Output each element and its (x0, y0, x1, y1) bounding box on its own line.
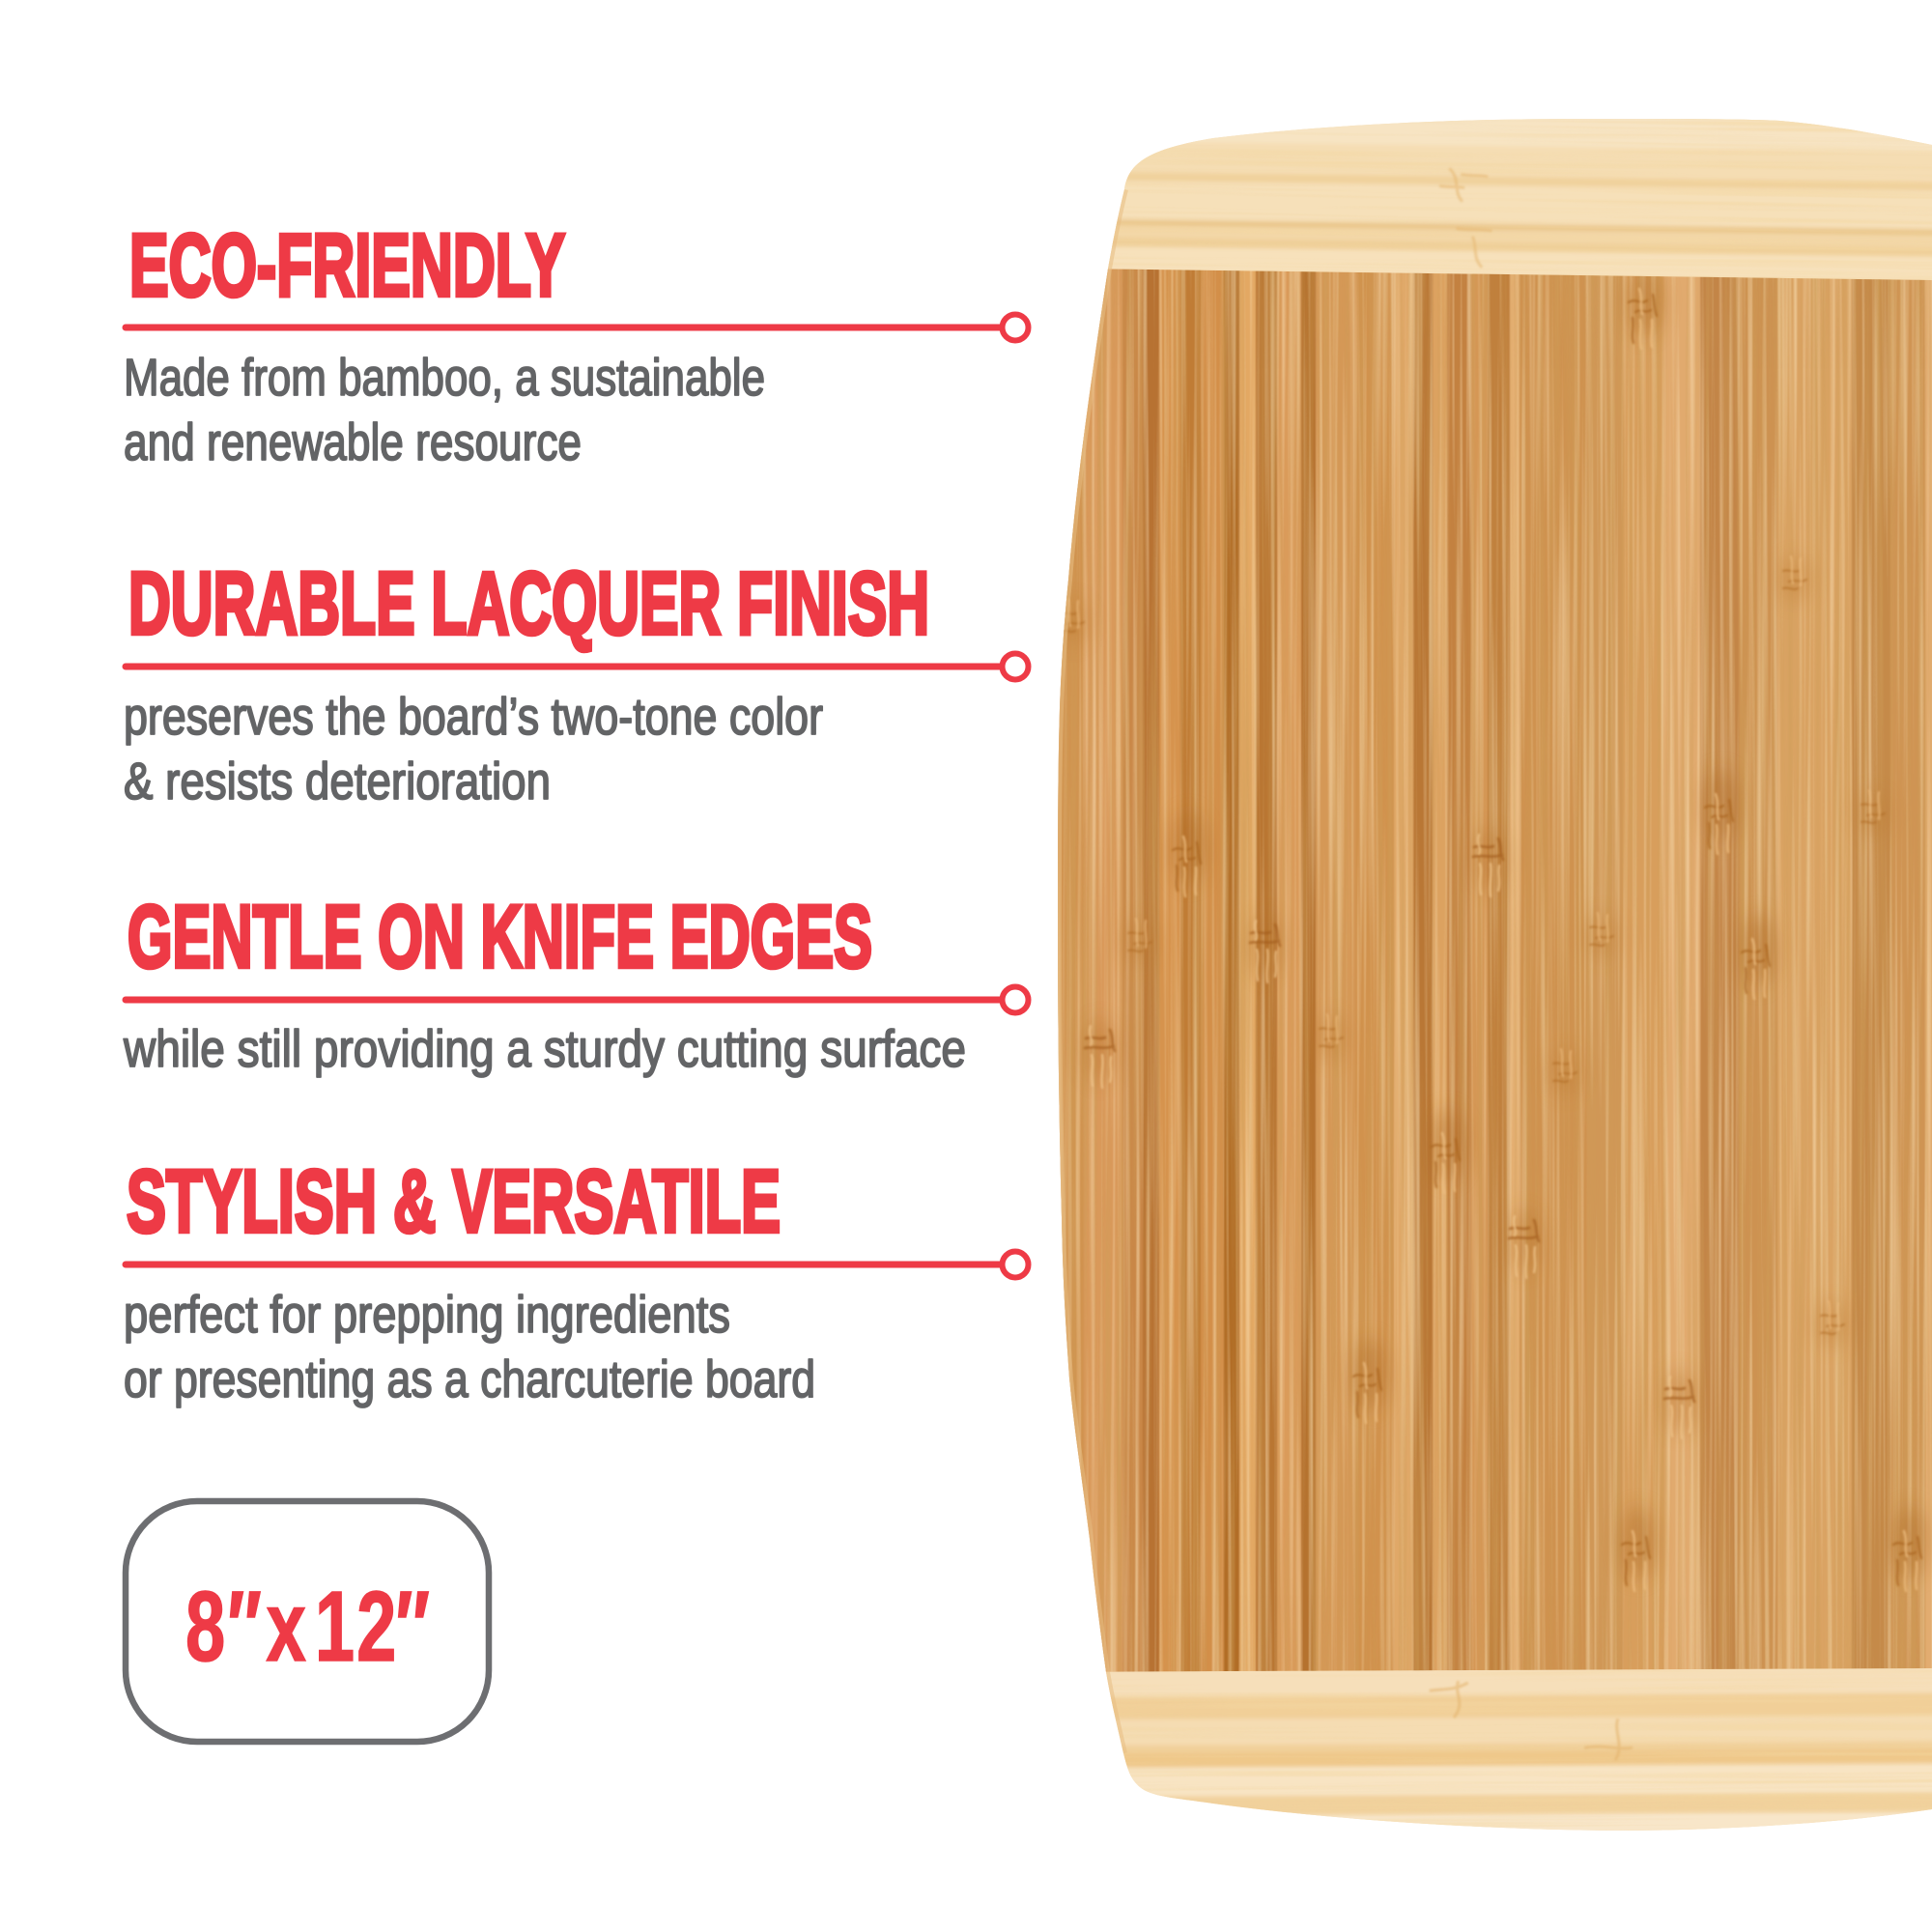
description: & resists deterioration (124, 753, 551, 810)
top light bamboo band (1108, 119, 1932, 276)
feature: eco-friendly (124, 216, 1028, 471)
lighter bevelled edge (1058, 189, 1124, 1753)
description: perfect for prepping ingredients (124, 1286, 730, 1344)
description: or presenting as a charcuterie board (124, 1350, 815, 1408)
heading: eco-friendly: ECO-FRIENDLY (129, 216, 565, 315)
badge outline (126, 1501, 489, 1742)
description: while still providing a sturdy cutting surface (123, 1020, 966, 1078)
board base in light bamboo (1043, 106, 1932, 1845)
panel: cutting board photo (1042, 105, 1932, 1845)
feature: stylish and versatile (124, 1152, 1028, 1408)
feature: durable lacquer finish (124, 554, 1028, 810)
heading: gentle on knife edges: GENTLE ON KNIFE EDGES (128, 888, 872, 986)
connector line with end ring (126, 315, 1028, 340)
feature: gentle on knife edges (123, 888, 1028, 1078)
bottom light bamboo band (1105, 1667, 1932, 1831)
description: and renewable resource (124, 413, 582, 471)
description (124, 688, 823, 810)
dark bamboo centre section (1043, 261, 1932, 1681)
heading: durable lacquer finish: DURABLE LACQUER FINISH (128, 554, 929, 653)
connector line with end ring (126, 987, 1028, 1012)
connector line with end ring (126, 1252, 1028, 1277)
fine wood grain (1043, 261, 1932, 1681)
node knots (1056, 264, 1927, 1591)
badge text: 8″x12″ (185, 1572, 430, 1683)
description (124, 349, 765, 471)
size badge (126, 1501, 489, 1742)
description (124, 1286, 815, 1408)
connector line with end ring (126, 653, 1028, 680)
vertical stripes (1043, 261, 1932, 1681)
description: preserves the board’s two-tone color (124, 688, 823, 746)
heading: stylish and versatile: STYLISH & VERSATILE (127, 1152, 781, 1251)
description: Made from bamboo, a sustainable (124, 349, 765, 407)
